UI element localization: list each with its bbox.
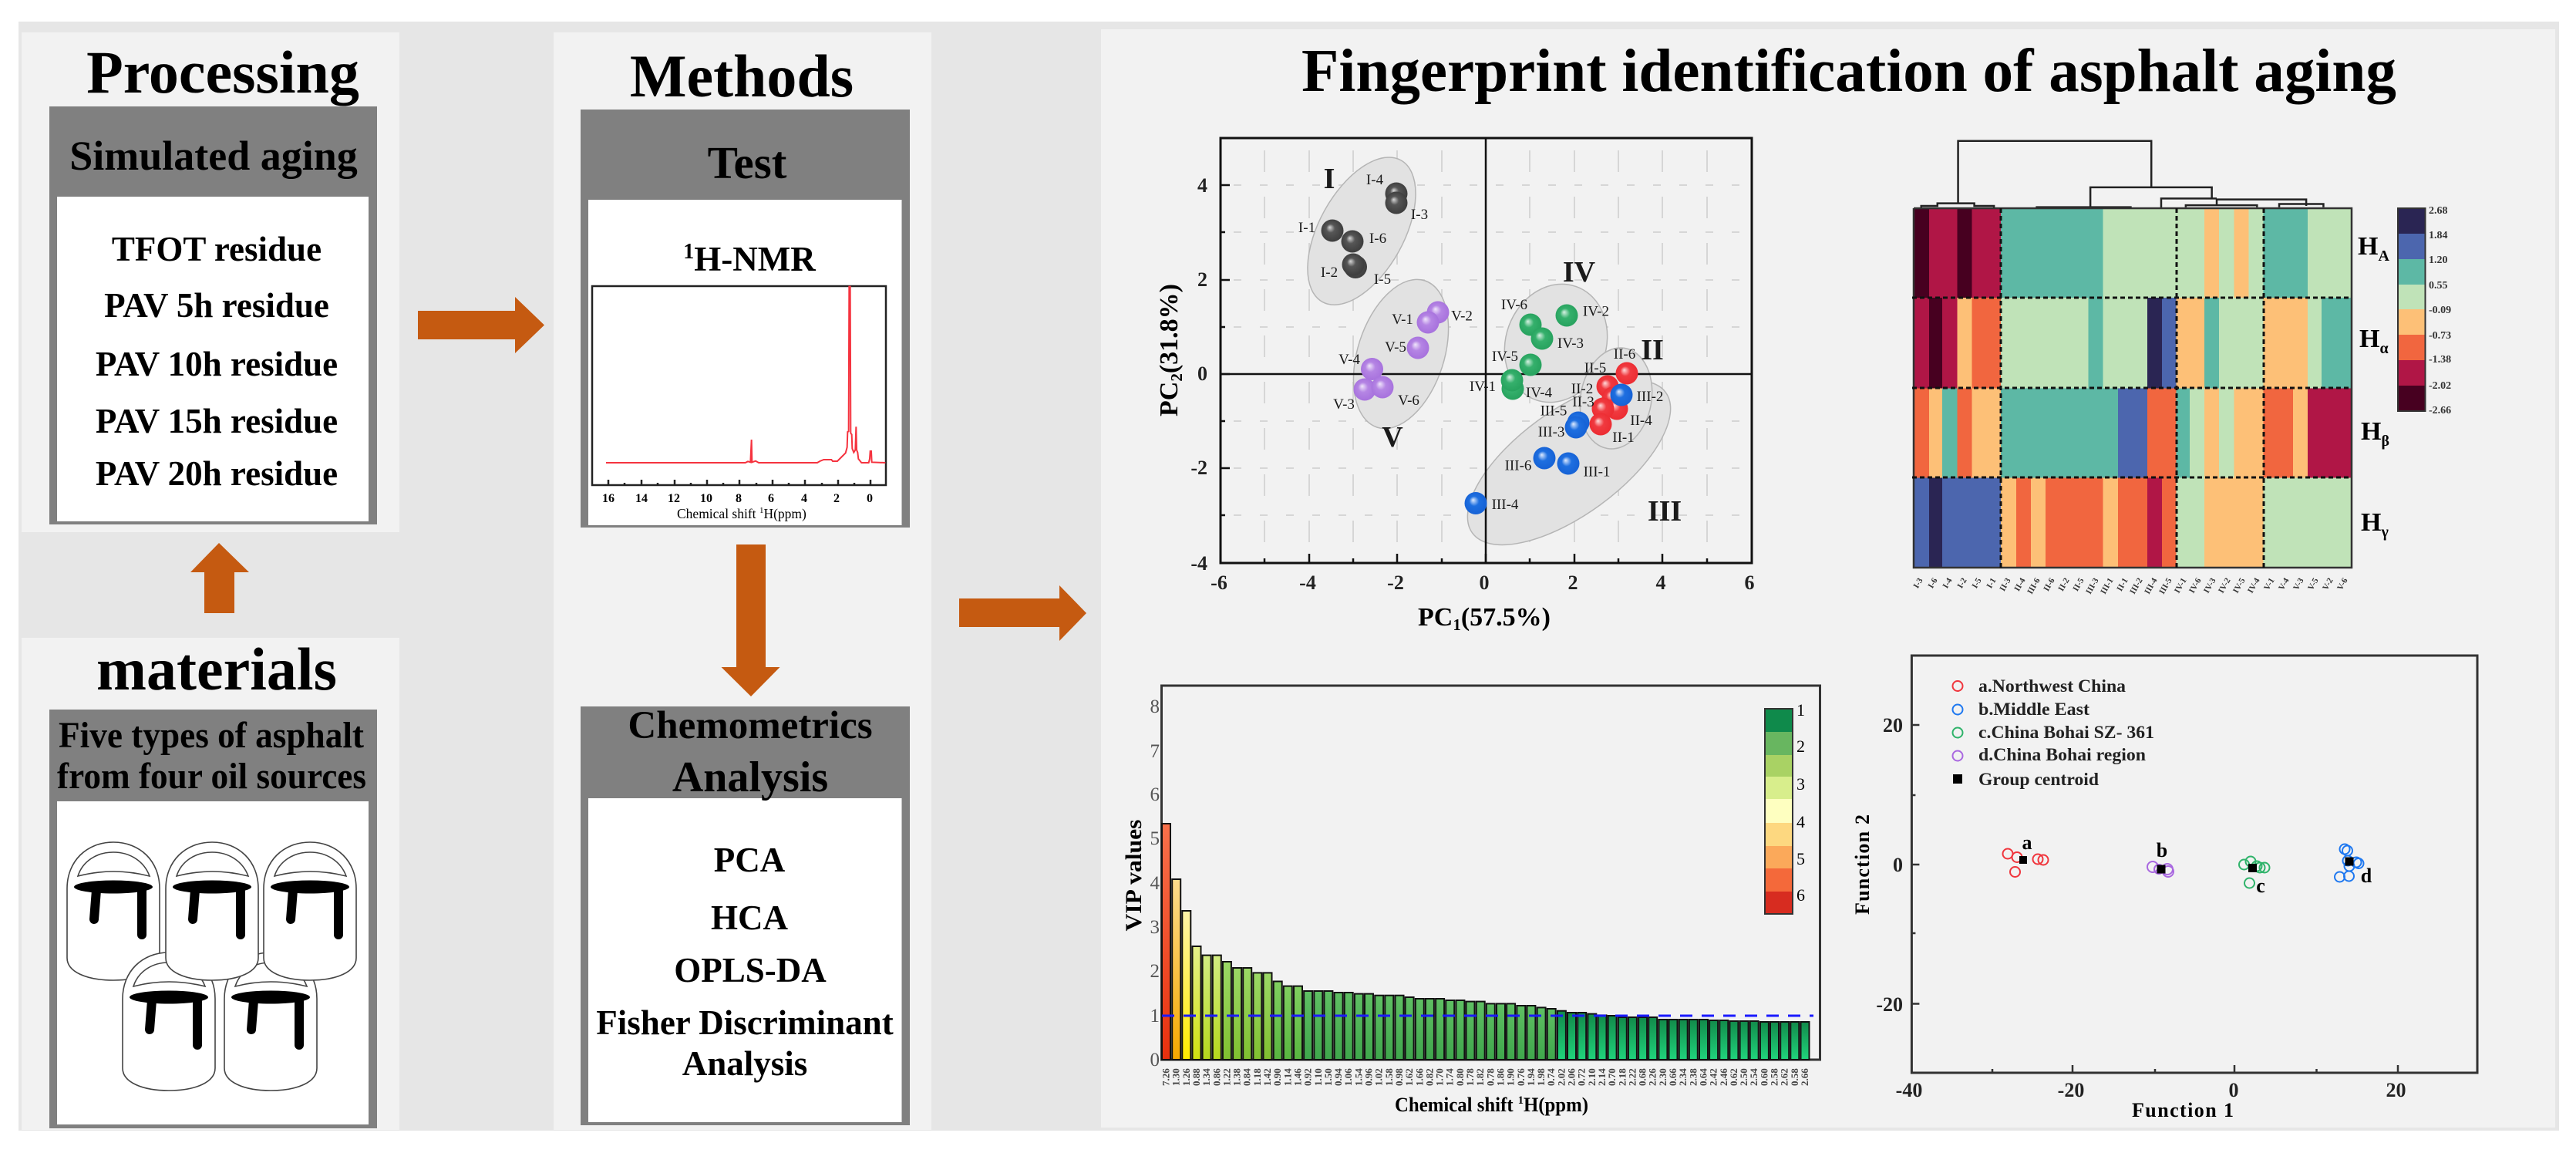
PCA axis titles — [1155, 284, 1551, 634]
VIP colour legend labels: 5 — [1796, 849, 1805, 868]
VIP x tick labels: 1.70 — [1434, 1068, 1446, 1086]
PCA tick labels — [1190, 174, 1755, 594]
heatmap column labels: III-3 — [2084, 576, 2101, 596]
VIP x tick labels: 2.42 — [1708, 1068, 1719, 1086]
heatmap column labels: II-4 — [2012, 576, 2028, 593]
VIP x tick labels: 1.30 — [1170, 1068, 1182, 1086]
VIP x tick labels: 2.22 — [1626, 1068, 1638, 1086]
PCA tick labels: -4 — [1190, 552, 1207, 575]
VIP x tick labels: 0.96 — [1363, 1068, 1374, 1086]
PCA group numerals: V — [1382, 421, 1403, 453]
NMR axis tick labels: 0 — [867, 492, 873, 505]
VIP y tick labels: 3 — [1150, 917, 1160, 938]
VIP y tick labels — [1150, 696, 1160, 1070]
PCA point labels: IV-3 — [1557, 335, 1584, 352]
VIP x tick labels: 0.84 — [1241, 1068, 1253, 1086]
VIP x tick labels: 0.62 — [1728, 1068, 1739, 1086]
VIP x tick labels: 1.94 — [1525, 1068, 1537, 1086]
heatmap column labels: V-3 — [2291, 576, 2306, 592]
icon: asphalt buckets — [67, 842, 356, 1091]
heatmap column labels: III-5 — [2157, 576, 2174, 596]
PCA group numerals: II — [1641, 334, 1664, 366]
VIP x tick labels: 0.92 — [1302, 1068, 1314, 1086]
VIP x tick labels: 1.38 — [1231, 1068, 1243, 1086]
VIP x tick labels: 2.58 — [1769, 1068, 1780, 1086]
PCA point labels — [1298, 172, 1663, 513]
panel: materials — [22, 635, 399, 1130]
NMR axis tick labels: 10 — [700, 492, 712, 505]
heatmap row labels: H — [2361, 417, 2381, 446]
VIP x tick labels: 2.02 — [1555, 1068, 1567, 1086]
main title: Fingerprint identification of asphalt aging — [1301, 38, 2396, 105]
VIP x tick labels: 0.66 — [1667, 1068, 1679, 1086]
VIP x axis title: Chemical shift — [1395, 1094, 1519, 1116]
heatmap column labels: II-6 — [2042, 576, 2057, 593]
heatmap column labels: II-2 — [2056, 576, 2072, 593]
cluster d — [2335, 844, 2372, 887]
PCA point labels: III-2 — [1637, 389, 1663, 405]
PCA point labels: IV-4 — [1526, 385, 1553, 401]
NMR axis tick labels: 2 — [833, 492, 840, 505]
VIP x tick labels: 1.18 — [1251, 1068, 1263, 1086]
cluster b — [2147, 839, 2174, 877]
heading: Processing: Processing — [86, 39, 359, 106]
PCA point labels: III-4 — [1492, 497, 1519, 513]
heatmap row labels: β — [2381, 433, 2389, 450]
PCA point labels: II-5 — [1584, 360, 1606, 376]
VIP y tick labels: 1 — [1150, 1006, 1160, 1027]
PCA axis titles: PC — [1418, 603, 1453, 632]
chart: HCA heatmap — [1911, 141, 2451, 596]
NMR axis tick labels: 16 — [602, 492, 615, 505]
VIP x tick labels: 2.18 — [1616, 1068, 1628, 1086]
discriminant tick labels: 20 — [2386, 1079, 2406, 1101]
PCA tick labels: -2 — [1190, 457, 1207, 479]
heatmap column labels: IV-3 — [2202, 576, 2218, 595]
list: aging residues: PAV 15h residue — [96, 402, 338, 440]
colour key labels: 0.55 — [2429, 280, 2447, 292]
card: chemometrics analysis — [581, 704, 910, 1125]
PCA tick labels: -6 — [1211, 571, 1227, 594]
PCA group numerals — [1324, 163, 1682, 528]
heatmap column labels: V-6 — [2335, 576, 2350, 592]
VIP x tick labels: 1.46 — [1292, 1068, 1303, 1086]
VIP x tick labels: 0.82 — [1423, 1068, 1435, 1086]
VIP colour legend labels: 6 — [1796, 885, 1805, 905]
card: simulated aging — [49, 106, 377, 524]
NMR axis title: 1 — [759, 506, 763, 515]
VIP x tick labels: 2.66 — [1799, 1068, 1810, 1086]
PCA point labels: II-1 — [1612, 430, 1635, 446]
spectrum trace — [606, 287, 885, 463]
PCA axis titles: 2 — [1167, 373, 1186, 382]
heatmap column labels: I-5 — [1970, 576, 1984, 590]
list: aging residues: PAV 10h residue — [96, 345, 338, 383]
card heading: simulated aging: Simulated aging — [69, 133, 358, 179]
cluster c: c — [2256, 875, 2265, 897]
heading: Methods: Methods — [630, 42, 854, 110]
heatmap row labels: H — [2361, 508, 2381, 537]
VIP x tick labels: 2.26 — [1647, 1068, 1658, 1086]
arrow: processing to methods — [418, 297, 544, 353]
discriminant legend: c.China Bohai SZ- 361 — [1978, 723, 2154, 742]
heatmap column labels: III-1 — [2099, 577, 2116, 596]
discriminant legend: Group centroid — [1978, 770, 2099, 789]
PCA points: II — [1590, 362, 1638, 435]
VIP colour legend labels: 1 — [1796, 700, 1805, 720]
discriminant tick labels: -20 — [2058, 1079, 2084, 1101]
VIP colour legend labels — [1796, 700, 1805, 905]
VIP x tick labels: 0.78 — [1484, 1068, 1496, 1086]
PCA point labels: I-6 — [1369, 231, 1386, 247]
PCA point labels: IV-5 — [1492, 349, 1518, 365]
VIP y tick labels: 8 — [1150, 696, 1160, 717]
heatmap column labels: V-1 — [2262, 577, 2277, 592]
VIP x axis title: H(ppm) — [1524, 1094, 1588, 1116]
list: chemometric methods: HCA — [711, 898, 788, 937]
PCA points: V — [1354, 301, 1450, 401]
NMR axis tick labels: 4 — [801, 492, 807, 505]
PCA points: I — [1322, 182, 1408, 278]
heatmap row labels — [2358, 232, 2389, 541]
list: chemometric methods: OPLS-DA — [674, 951, 827, 989]
VIP x tick labels: 0.58 — [1789, 1068, 1800, 1086]
heatmap column labels: IV-2 — [2217, 576, 2233, 595]
PCA point labels: V-1 — [1392, 312, 1413, 328]
PCA point labels: I-4 — [1366, 172, 1384, 188]
discriminant legend: d.China Bohai region — [1978, 745, 2146, 764]
VIP x tick labels: 0.68 — [1637, 1068, 1648, 1086]
VIP x tick labels: 1.42 — [1261, 1068, 1273, 1086]
panel: fingerprint identification — [1101, 29, 2555, 1128]
VIP colour legend labels: 3 — [1796, 774, 1805, 794]
NMR axis title: H(ppm) — [763, 506, 806, 521]
chart: Fisher discriminant scatter — [1851, 656, 2477, 1121]
discriminant tick labels: 0 — [2228, 1079, 2239, 1101]
VIP x tick labels: 0.94 — [1332, 1068, 1344, 1086]
heatmap column labels: V-4 — [2277, 576, 2291, 592]
VIP y tick labels: 0 — [1150, 1050, 1160, 1070]
VIP x tick labels: 1.86 — [1494, 1068, 1507, 1086]
heatmap column labels: II-5 — [2071, 576, 2086, 593]
NMR axis tick labels: 8 — [736, 492, 742, 505]
list: chemometric methods: PCA — [714, 841, 786, 879]
PCA tick labels: 6 — [1744, 571, 1755, 594]
PCA point labels: V-4 — [1339, 352, 1360, 368]
cluster a — [2003, 831, 2048, 877]
heatmap column labels: III-2 — [2128, 576, 2145, 596]
panel: methods — [554, 32, 931, 1130]
VIP x tick labels: 1.66 — [1413, 1068, 1425, 1086]
chart: PCA score plot — [1155, 138, 1755, 634]
heatmap frame and dashed cluster lines — [1912, 208, 2352, 568]
heatmap column labels: IV-1 — [2173, 577, 2189, 595]
list: chemometric methods: Fisher Discriminant — [596, 1003, 894, 1042]
colour key labels: -2.66 — [2429, 405, 2451, 416]
VIP threshold line — [1162, 1015, 1813, 1016]
VIP x tick labels: 1.26 — [1180, 1068, 1192, 1086]
PCA point labels: IV-2 — [1583, 304, 1609, 319]
VIP bars — [1162, 824, 1809, 1060]
PCA point labels: V-5 — [1385, 339, 1406, 356]
PCA tick labels: -4 — [1299, 571, 1316, 594]
VIP x tick labels: 1.82 — [1474, 1068, 1486, 1086]
arrow: materials up to processing — [190, 543, 249, 613]
VIP x tick labels: 0.76 — [1515, 1068, 1527, 1086]
PCA point labels: III-6 — [1505, 458, 1531, 474]
list: aging residues — [96, 230, 338, 493]
list: aging residues: TFOT residue — [112, 230, 322, 268]
PCA point labels: IV-6 — [1501, 297, 1527, 313]
colour key labels: -2.02 — [2429, 380, 2451, 392]
chart: NMR spectrum — [592, 286, 886, 521]
PCA point labels: II-6 — [1614, 346, 1635, 362]
heatmap column labels: II-3 — [1998, 576, 2013, 593]
subheading: 1H-NMR: H-NMR — [694, 240, 816, 278]
colour key labels: 2.68 — [2429, 205, 2447, 217]
NMR axis title: Chemical shift — [677, 506, 756, 521]
VIP x tick labels: 1.62 — [1403, 1068, 1415, 1086]
list: chemometric methods — [596, 841, 894, 1083]
NMR axis tick labels: 14 — [635, 492, 648, 505]
colour key labels: -0.73 — [2429, 330, 2451, 342]
subheading: 1H-NMR: 1 — [683, 240, 694, 264]
PCA tick labels: 4 — [1197, 174, 1207, 197]
heatmap column labels: I-4 — [1941, 576, 1955, 590]
discriminant tick labels: -40 — [1896, 1079, 1922, 1101]
cluster c — [2239, 856, 2270, 897]
PCA group ellipses — [1285, 140, 1696, 575]
discriminant axis titles: Function 2 — [1851, 814, 1874, 915]
PCA point labels: II-4 — [1630, 413, 1652, 429]
discriminant legend — [1952, 676, 2154, 789]
VIP x tick labels: 1.50 — [1322, 1068, 1334, 1086]
arrow: methods to results — [959, 585, 1086, 641]
VIP y tick labels: 7 — [1150, 741, 1160, 762]
list: chemometric methods: Analysis — [682, 1044, 807, 1083]
PCA group numerals: I — [1324, 163, 1335, 195]
VIP x tick labels: 1.90 — [1505, 1068, 1517, 1086]
heatmap column labels: V-5 — [2306, 576, 2321, 592]
heatmap row labels: H — [2358, 232, 2378, 261]
heatmap column labels: I-2 — [1955, 576, 1969, 590]
VIP x tick labels: 0.86 — [1211, 1068, 1222, 1086]
PCA point labels: V-3 — [1333, 396, 1355, 413]
VIP y tick labels: 6 — [1150, 784, 1160, 805]
VIP x tick labels: 1.74 — [1444, 1068, 1456, 1086]
PCA axes — [1221, 138, 1752, 563]
list: aging residues: PAV 5h residue — [104, 286, 329, 325]
VIP x tick labels: 2.50 — [1738, 1068, 1749, 1086]
VIP x tick labels: 0.64 — [1698, 1068, 1709, 1086]
VIP colour legend labels: 2 — [1796, 737, 1805, 756]
VIP x tick labels: 1.22 — [1221, 1068, 1232, 1086]
PCA tick labels: 2 — [1568, 571, 1578, 594]
heatmap cells — [1914, 208, 2352, 568]
VIP x tick labels: 1.78 — [1464, 1068, 1476, 1086]
cluster b: b — [2157, 839, 2167, 861]
discriminant tick labels — [1876, 714, 2406, 1101]
PCA points: IV — [1500, 304, 1578, 400]
heatmap colour key — [2398, 205, 2451, 416]
PCA point labels: I-1 — [1298, 220, 1315, 236]
PCA tick labels: -2 — [1387, 571, 1404, 594]
cluster a: a — [2022, 831, 2032, 854]
VIP x tick labels: 2.06 — [1565, 1068, 1578, 1086]
VIP y tick labels: 2 — [1150, 961, 1160, 982]
heatmap column labels: V-2 — [2321, 576, 2335, 592]
PCA tick labels: 0 — [1197, 362, 1207, 385]
heatmap column labels: III-6 — [2025, 576, 2042, 596]
VIP x tick labels: 1.10 — [1312, 1068, 1324, 1086]
VIP colour legend — [1765, 700, 1805, 914]
VIP x tick labels: 2.34 — [1677, 1068, 1689, 1086]
PCA point labels: V-6 — [1398, 393, 1419, 409]
card heading: test: Test — [708, 137, 787, 188]
NMR axis tick labels: 12 — [668, 492, 680, 505]
VIP x tick labels: 2.38 — [1687, 1068, 1699, 1086]
VIP y tick labels: 5 — [1150, 828, 1160, 849]
heatmap column labels: IV-5 — [2231, 576, 2248, 595]
VIP x tick labels: 2.30 — [1657, 1068, 1669, 1086]
heatmap column labels: II-1 — [2115, 577, 2130, 593]
VIP x tick labels: 1.02 — [1373, 1068, 1385, 1086]
heatmap column labels: I-1 — [1985, 577, 1999, 590]
VIP y tick labels: 4 — [1150, 873, 1160, 894]
discriminant tick labels: 0 — [1893, 854, 1903, 876]
card: test — [581, 110, 910, 528]
heatmap column labels: IV-6 — [2187, 576, 2204, 595]
arrow: test to chemometrics — [722, 544, 780, 696]
discriminant legend: b.Middle East — [1978, 700, 2089, 719]
VIP x tick labels: 1.54 — [1352, 1068, 1364, 1086]
chart: VIP bar chart — [1121, 686, 1820, 1116]
colour key labels — [2429, 205, 2451, 416]
VIP x tick labels: 0.72 — [1576, 1068, 1588, 1086]
NMR axis tick labels: 6 — [768, 492, 774, 505]
discriminant axis titles — [1851, 814, 2234, 1121]
colour key labels: 1.20 — [2429, 255, 2447, 266]
card heading: asphalt types: Five types of asphalt — [59, 715, 364, 756]
cluster d: d — [2361, 865, 2372, 887]
VIP x tick labels: 2.14 — [1596, 1068, 1608, 1086]
VIP x tick labels: 2.54 — [1748, 1068, 1759, 1086]
PCA point labels: I-2 — [1321, 265, 1338, 281]
PCA axis titles: 1 — [1453, 615, 1461, 634]
VIP x tick labels: 0.90 — [1271, 1068, 1283, 1086]
heatmap column labels: IV-4 — [2246, 576, 2262, 595]
heading: materials: materials — [96, 635, 337, 703]
PCA tick labels: 2 — [1197, 268, 1207, 291]
VIP x tick labels: 2.10 — [1586, 1068, 1598, 1086]
PCA axis titles: PC — [1155, 382, 1184, 416]
discriminant tick labels: 20 — [1883, 714, 1903, 737]
heatmap column labels: III-4 — [2143, 576, 2160, 596]
heatmap row labels: H — [2359, 325, 2379, 353]
PCA point labels: I-3 — [1411, 207, 1428, 223]
PCA point labels: II-3 — [1572, 394, 1594, 410]
card heading: asphalt types — [57, 715, 366, 797]
colour key labels: -1.38 — [2429, 354, 2451, 366]
card: asphalt types — [49, 710, 377, 1128]
colour key labels: 1.84 — [2429, 230, 2447, 241]
heatmap column labels: I-3 — [1911, 576, 1925, 590]
discriminant axis titles: Function 1 — [2132, 1099, 2234, 1121]
VIP x axis title: 1 — [1518, 1094, 1524, 1107]
PCA axis titles: (57.5%) — [1461, 603, 1551, 632]
heatmap column labels — [1911, 576, 2350, 596]
card heading: chemometrics analysis: Chemometrics — [628, 704, 873, 747]
VIP x tick labels: 0.98 — [1393, 1068, 1405, 1086]
heatmap row labels: γ — [2380, 524, 2389, 541]
colour key labels: -0.09 — [2429, 305, 2451, 316]
VIP x tick labels: 0.74 — [1545, 1068, 1557, 1086]
PCA tick labels: 4 — [1656, 571, 1665, 594]
panel: processing — [22, 32, 399, 532]
NMR axis tick labels — [602, 492, 873, 505]
card heading: chemometrics analysis — [628, 704, 873, 801]
card heading: asphalt types: from four oil sources — [57, 756, 366, 797]
PCA group numerals: IV — [1563, 256, 1596, 288]
VIP x tick labels: 0.60 — [1758, 1068, 1770, 1086]
dendrogram — [1921, 141, 2323, 208]
VIP x tick labels: 1.34 — [1200, 1068, 1212, 1086]
VIP x tick labels: 2.46 — [1718, 1068, 1729, 1086]
PCA point labels: IV-1 — [1470, 379, 1496, 395]
VIP x tick labels: 7.26 — [1160, 1068, 1172, 1086]
card heading: chemometrics analysis: Analysis — [672, 753, 828, 801]
list: aging residues: PAV 20h residue — [96, 454, 338, 493]
VIP x tick labels: 1.98 — [1535, 1068, 1547, 1086]
VIP x tick labels: 1.14 — [1281, 1068, 1293, 1086]
VIP y axis title: VIP values — [1121, 819, 1147, 932]
discriminant tick labels: -20 — [1876, 993, 1903, 1016]
PCA point labels: I-5 — [1374, 271, 1391, 288]
heatmap column labels: I-6 — [1926, 576, 1940, 590]
VIP x tick labels — [1160, 1068, 1810, 1086]
discriminant legend: a.Northwest China — [1978, 676, 2126, 696]
discriminant frame — [1911, 656, 2477, 1073]
heatmap row labels: α — [2379, 340, 2389, 357]
VIP x tick labels: 0.80 — [1454, 1068, 1466, 1086]
VIP x tick labels: 0.88 — [1190, 1068, 1202, 1086]
PCA point labels: III-5 — [1541, 403, 1567, 420]
PCA point labels: III-1 — [1584, 464, 1610, 480]
PCA group numerals: III — [1648, 495, 1682, 528]
PCA axis titles: (31.8%) — [1155, 284, 1184, 373]
PCA point labels: V-2 — [1451, 308, 1473, 324]
heatmap row labels: A — [2378, 248, 2389, 265]
PCA tick labels: 0 — [1479, 571, 1490, 594]
PCA point labels: III-3 — [1538, 424, 1564, 440]
VIP colour legend labels: 4 — [1796, 812, 1805, 831]
PCA points: III — [1465, 384, 1633, 514]
VIP x tick labels: 1.06 — [1342, 1068, 1354, 1086]
PCA grid — [1234, 150, 1752, 563]
VIP x tick labels: 0.70 — [1606, 1068, 1618, 1086]
VIP x tick labels: 1.58 — [1383, 1068, 1395, 1086]
PCA point labels: II-2 — [1571, 381, 1593, 397]
VIP frame — [1161, 686, 1820, 1060]
VIP x tick labels: 2.62 — [1779, 1068, 1790, 1086]
